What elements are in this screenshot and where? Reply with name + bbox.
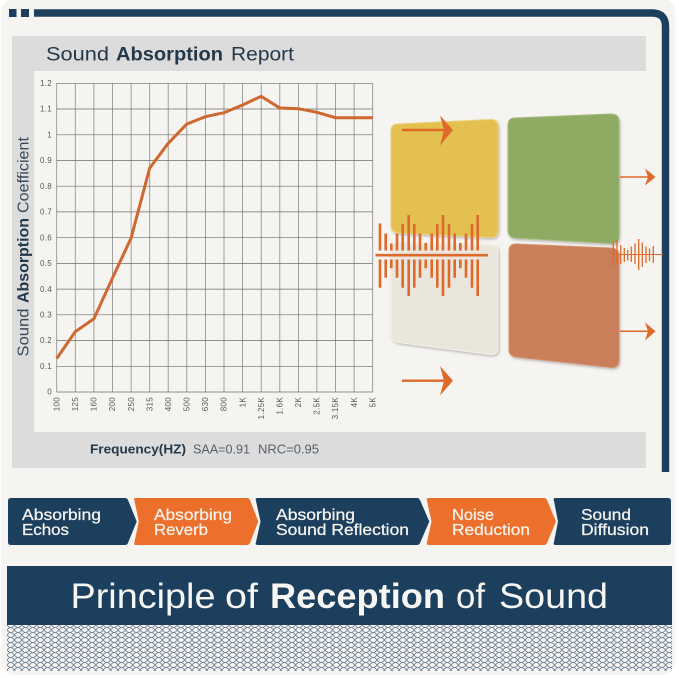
y axis labels: 0.9 <box>40 156 52 165</box>
tag: Absorbing Sound Reflection: Absorbing <box>276 507 355 524</box>
heading: Sound Absorption Report: Absorption <box>116 44 223 66</box>
arrow: out of terracotta panel <box>620 322 656 340</box>
tag: Absorbing Reverb: Reverb <box>154 522 208 539</box>
acoustic panels <box>391 114 619 368</box>
x axis labels: 2K <box>294 397 303 407</box>
tag: Sound Diffusion: Diffusion <box>581 522 649 539</box>
x axis labels: 315 <box>145 397 154 411</box>
title banner: Sound <box>499 577 608 616</box>
y axis labels: 0.6 <box>40 233 52 242</box>
panel: green <box>508 114 619 244</box>
y axis labels: 0.3 <box>40 310 52 320</box>
x axis labels: 1K <box>238 397 247 407</box>
tag: Sound Diffusion: Sound <box>581 507 631 524</box>
x axis labels: 1.6K <box>276 397 284 415</box>
y axis labels: 0.8 <box>40 182 52 191</box>
icon: reduced sound wave <box>613 239 663 270</box>
x axis labels: 3.15K <box>331 397 340 419</box>
x axis labels: 250 <box>127 397 136 411</box>
tag: Absorbing Sound Reflection: Sound Reflection <box>276 522 409 539</box>
x axis labels: 630 <box>201 397 210 411</box>
tag: Sound Diffusion <box>554 498 671 545</box>
y axis labels: 0.1 <box>40 362 52 371</box>
tag: Absorbing Sound Reflection <box>256 498 429 545</box>
y axis labels: 0.2 <box>40 336 52 345</box>
x axis labels: 125 <box>71 397 80 411</box>
axis title: Sound Absorption Coefficient: Absorption <box>16 218 32 303</box>
tag: Noise Reduction: Reduction <box>452 522 530 539</box>
y axis labels: 0.7 <box>40 208 52 217</box>
title banner: Principle <box>70 577 216 616</box>
arrow: out of green panel <box>620 168 656 186</box>
arrow: into yellow panel <box>402 116 453 146</box>
x axis labels: 2.5K <box>313 397 322 415</box>
frequency caption: SAA=0.91 <box>193 442 250 456</box>
axis title: Sound Absorption Coefficient <box>16 136 32 356</box>
x axis labels: 4K <box>350 397 359 407</box>
tag: Noise Reduction: Noise <box>452 507 494 524</box>
tag: Absorbing Reverb: Absorbing <box>154 507 232 524</box>
x axis labels: 500 <box>182 397 192 411</box>
heading: Sound Absorption Report <box>46 44 295 66</box>
title banner: of <box>225 577 258 616</box>
frequency caption: Frequency(HZ) <box>90 442 186 456</box>
frequency caption <box>90 442 319 456</box>
x axis labels <box>52 397 377 419</box>
heading: Sound Absorption Report: Sound <box>46 44 109 66</box>
x axis labels: 200 <box>108 397 117 411</box>
lattice pattern strip <box>7 625 672 671</box>
panel: terracotta <box>509 244 619 368</box>
arrow: below cream panel <box>402 366 453 396</box>
icon: incoming sound wave <box>376 215 488 296</box>
y axis labels: 1.1 <box>40 105 52 114</box>
tag: Absorbing Echos: Absorbing <box>22 507 101 524</box>
absorption curve <box>57 96 373 359</box>
heading: Sound Absorption Report: Report <box>231 44 295 66</box>
line chart <box>40 79 377 419</box>
x axis labels: 1.25K <box>257 397 266 419</box>
y axis labels: 1.2 <box>40 79 52 88</box>
frequency caption: NRC=0.95 <box>258 442 319 456</box>
tag: Absorbing Reverb <box>134 498 258 545</box>
tag: Absorbing Echos: Echos <box>22 522 69 539</box>
title banner: Reception <box>270 577 445 616</box>
tag: Noise Reduction <box>427 498 556 545</box>
axis title: Sound Absorption Coefficient: Sound <box>16 309 32 356</box>
panel: yellow <box>391 119 498 238</box>
panel: cream <box>391 243 498 355</box>
title banner <box>7 566 672 625</box>
x axis labels: 100 <box>52 397 61 411</box>
panel: report frame <box>12 36 646 468</box>
y axis labels: 1 <box>47 130 52 140</box>
axis title: Sound Absorption Coefficient: Coefficient <box>16 136 32 213</box>
y axis labels: 0.5 <box>40 259 52 268</box>
x axis labels: 800 <box>220 397 229 411</box>
navy frame line <box>9 9 666 472</box>
y axis labels: 0.4 <box>40 285 52 294</box>
tag: Absorbing Echos <box>8 498 137 545</box>
y axis labels <box>40 79 52 397</box>
x axis labels: 400 <box>164 397 173 411</box>
y axis labels: 0 <box>47 388 52 397</box>
x axis labels: 160 <box>90 397 99 411</box>
x axis labels: 5K <box>368 397 377 407</box>
title banner: of <box>456 577 485 616</box>
